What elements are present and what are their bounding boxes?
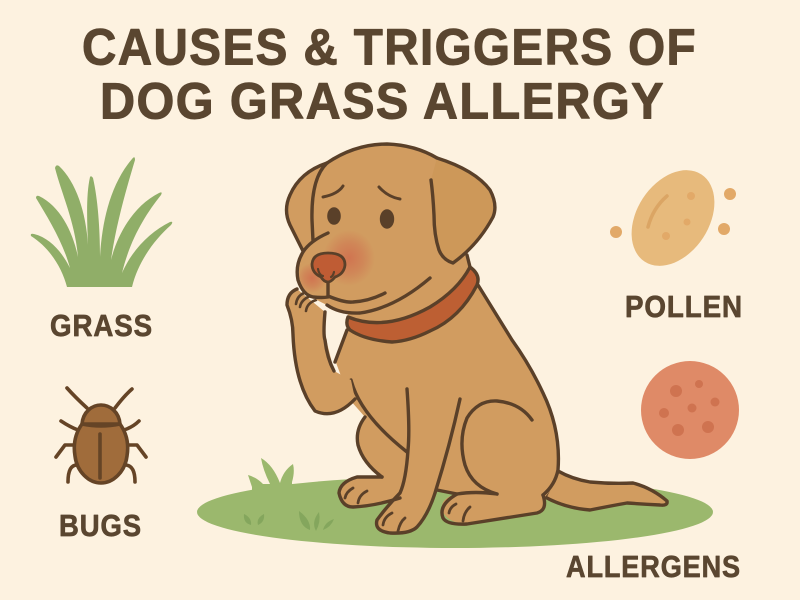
head inner lines — [297, 163, 328, 298]
background gap by arm — [327, 310, 349, 365]
collar — [347, 267, 478, 342]
nose — [312, 253, 345, 282]
right ear — [431, 158, 495, 263]
title: DOG GRASS ALLERGY — [100, 72, 665, 130]
ground: grass patch — [197, 458, 713, 548]
title: CAUSES & TRIGGERS OF — [82, 18, 697, 76]
label: pollen: POLLEN — [625, 289, 743, 324]
eyebrows — [323, 186, 400, 199]
label: allergens: ALLERGENS — [566, 549, 741, 584]
label: bugs: BUGS — [59, 508, 142, 543]
body — [335, 285, 558, 533]
body outline — [339, 285, 558, 533]
icon: grass — [31, 157, 172, 287]
toes on feet — [345, 488, 470, 531]
paw toes — [296, 293, 316, 311]
title — [82, 18, 697, 130]
cheek redness — [297, 230, 375, 293]
label: grass: GRASS — [50, 308, 153, 343]
icon: pollen — [610, 155, 736, 281]
left ear — [286, 163, 327, 251]
icon: bug — [56, 388, 146, 483]
icon: allergen — [641, 361, 739, 459]
eyes — [327, 207, 394, 229]
dog — [286, 144, 667, 533]
tail — [545, 471, 667, 510]
head — [297, 144, 478, 335]
raised paw — [287, 289, 355, 414]
